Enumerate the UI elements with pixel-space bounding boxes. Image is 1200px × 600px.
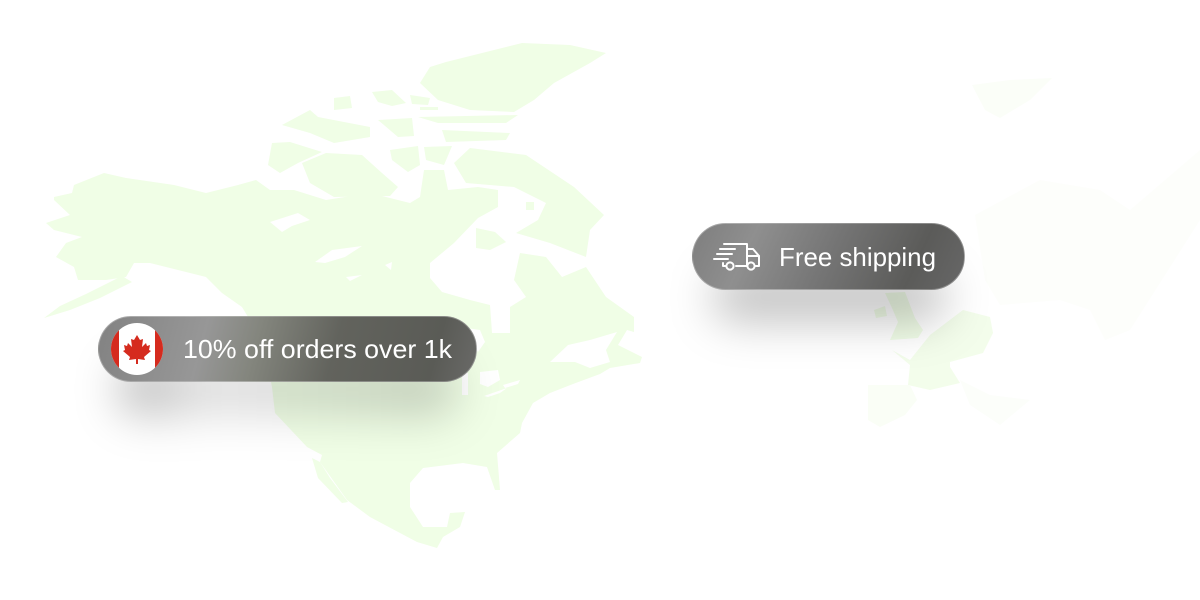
badge: 10% off orders over 1k <box>98 316 477 382</box>
text: free shipping: Free shipping <box>779 242 936 272</box>
free shipping badge shadow <box>712 272 947 322</box>
map: inland waters <box>270 213 617 397</box>
map: North America <box>44 43 642 548</box>
discount badge shadow <box>118 362 458 416</box>
badge: free shipping <box>692 223 965 290</box>
icon: delivery truck <box>714 244 759 270</box>
icon: Canadian flag <box>110 322 164 376</box>
text: discount: 10% off orders over 1k <box>183 334 453 364</box>
map: Europe <box>868 78 1200 427</box>
